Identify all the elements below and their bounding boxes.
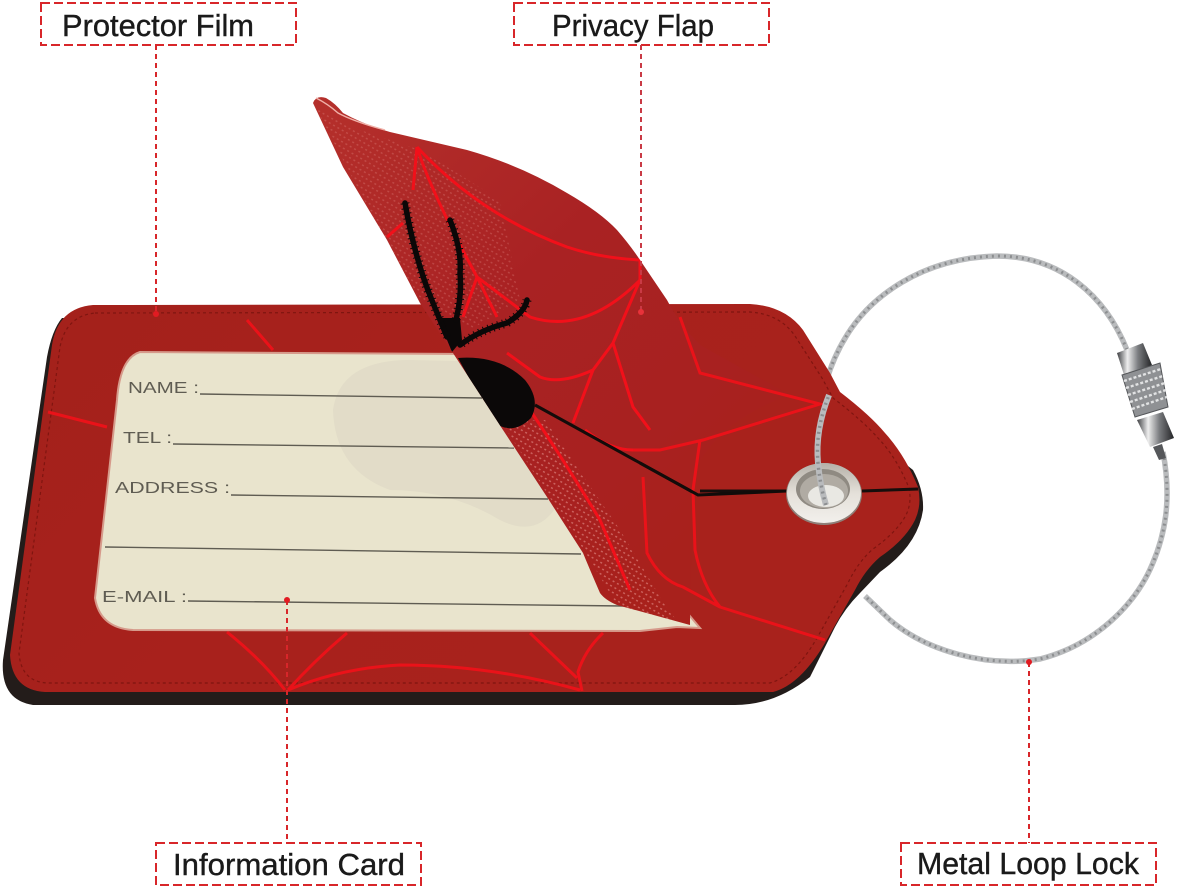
callout: Information Card: Information Card — [173, 847, 405, 882]
icon: spider — [405, 203, 535, 428]
card field labels: E-MAIL : — [102, 589, 187, 606]
privacy flap — [313, 97, 692, 625]
metal loop lock — [1117, 343, 1174, 460]
luggage tag body — [3, 304, 923, 705]
tag seam — [700, 489, 918, 491]
flap crease seam — [535, 405, 698, 495]
callout: Metal Loop Lock — [901, 659, 1156, 885]
wire through eyelet — [817, 395, 829, 505]
flap web lines — [387, 147, 650, 590]
card field labels — [102, 380, 230, 606]
card field labels: TEL : — [123, 430, 172, 447]
wire loop behind tag — [818, 256, 1167, 661]
tag web lines — [48, 320, 603, 691]
information card window — [95, 352, 700, 631]
callout: Protector Film: Protector Film — [62, 8, 254, 43]
callout: Privacy Flap — [514, 3, 769, 315]
card watermark — [333, 360, 560, 527]
callout: Privacy Flap: Privacy Flap — [552, 8, 714, 43]
card field labels: ADDRESS : — [115, 480, 230, 497]
card field labels: NAME : — [128, 380, 199, 397]
callout: Metal Loop Lock: Metal Loop Lock — [917, 846, 1139, 881]
flap tip highlight — [316, 98, 385, 130]
flap leather grain — [313, 103, 698, 625]
flap crease kink — [640, 463, 787, 495]
eyelet — [786, 463, 862, 525]
callout: Protector Film — [41, 3, 296, 317]
card lines — [105, 394, 624, 606]
right tag web lines — [633, 317, 825, 640]
callout: Information Card — [156, 597, 421, 885]
